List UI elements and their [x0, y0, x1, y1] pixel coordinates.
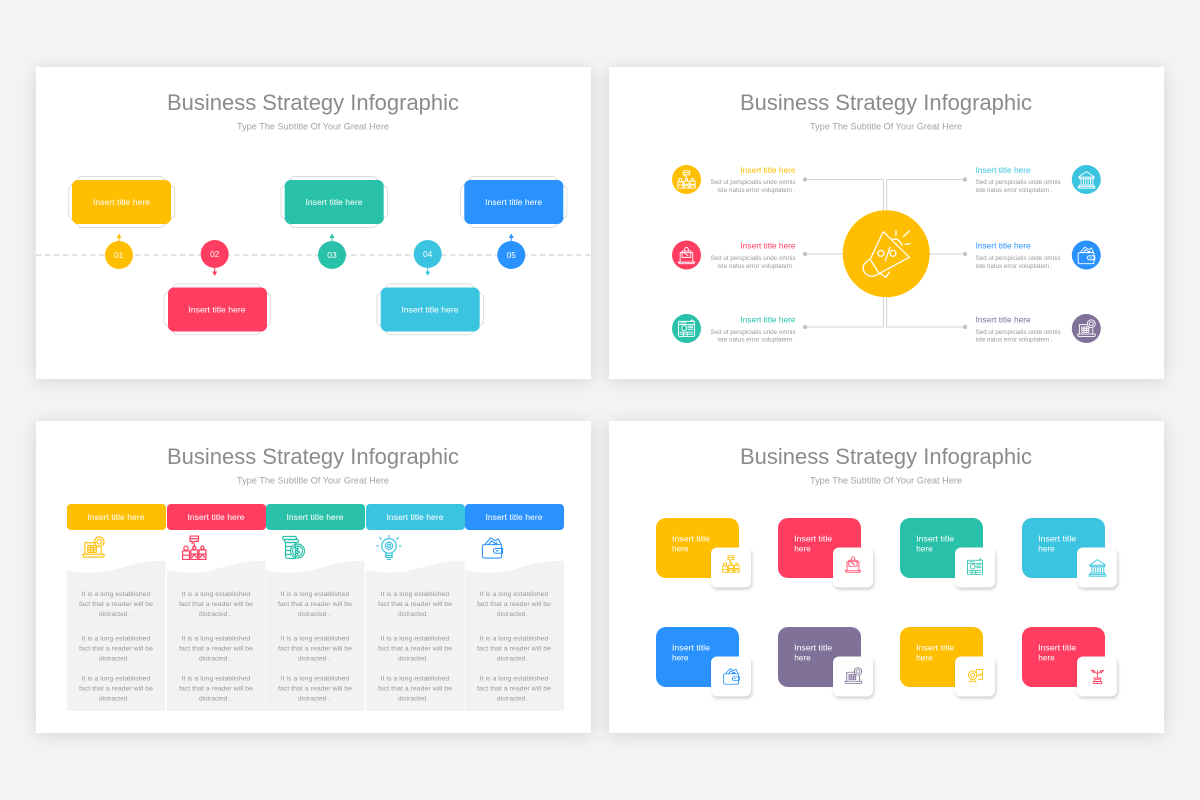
column 4: fact that a reader will be — [378, 601, 452, 608]
item: cyan, right top: iste natus error voluptatem . — [976, 187, 1053, 194]
column 5: fact that a reader will be — [477, 601, 551, 608]
card 3: Insert title — [916, 534, 954, 544]
step 04 title box: Insert title here — [402, 304, 459, 314]
step 04 marker: 04 — [423, 249, 433, 259]
subtitle: Type The Subtitle Of Your Great Here — [237, 122, 389, 132]
step 05 marker — [497, 234, 525, 269]
column 4 — [366, 504, 465, 711]
item: yellow, left top: iste natus error voluptatem . — [718, 187, 796, 194]
column 5: It is a long established — [480, 676, 548, 682]
card 4: Insert title — [1038, 534, 1076, 544]
title: Business Strategy Infographic — [167, 444, 459, 469]
column 2: fact that a reader will be — [179, 601, 253, 608]
item: red, left middle: Insert title here — [740, 240, 796, 250]
item: yellow, left top: Insert title here — [740, 165, 796, 175]
column 2: distracted . — [199, 611, 231, 618]
column 2: It is a long established — [182, 591, 250, 598]
column 5: Insert title here — [486, 512, 543, 522]
item: teal, left bottom: iste natus error voluptatem . — [718, 337, 796, 344]
column 1: It is a long established — [82, 636, 150, 643]
step 02 marker — [201, 240, 229, 276]
step 01 title box — [68, 176, 175, 228]
item: teal, left bottom: Sed ut perspiciatis unde omnis — [710, 329, 796, 336]
column 1: fact that a reader will be — [79, 601, 153, 608]
item: purple, right bottom: iste natus error voluptatem . — [976, 337, 1053, 344]
panel: hub diagram — [609, 67, 1164, 379]
card 1 — [656, 518, 751, 588]
step 01 marker: 01 — [114, 250, 124, 260]
item: purple, right bottom: Insert title here — [976, 314, 1031, 324]
column 4: Insert title here — [386, 512, 444, 522]
step 02 marker: 02 — [210, 249, 220, 259]
column 1: distracted . — [99, 656, 131, 663]
card 7: here — [916, 652, 933, 662]
item: red, left middle: Sed ut perspiciatis unde omnis — [710, 255, 796, 262]
column 3: Insert title here — [286, 512, 344, 522]
column 3: It is a long established — [281, 591, 349, 598]
card 3 — [900, 518, 995, 588]
card 2: here — [794, 544, 811, 554]
card 1: here — [672, 544, 689, 554]
item: red, left middle: iste natus error voluptatem . — [718, 263, 796, 270]
card 5: here — [672, 652, 689, 662]
column 1: fact that a reader will be — [79, 646, 153, 652]
column 1: distracted . — [99, 695, 131, 702]
step 02 title box — [164, 284, 270, 335]
column 4: distracted . — [398, 656, 430, 663]
column 3: fact that a reader will be — [278, 601, 352, 608]
column 4: It is a long established — [381, 591, 449, 598]
column 4: It is a long established — [381, 676, 449, 682]
card 7: Insert title — [916, 642, 954, 652]
title: Business Strategy Infographic — [167, 90, 459, 115]
column 5: fact that a reader will be — [477, 646, 551, 652]
column 2: distracted . — [199, 656, 231, 663]
column 1: distracted . — [99, 611, 131, 618]
step 05 marker: 05 — [507, 250, 516, 260]
column 4: distracted . — [398, 611, 430, 618]
item: yellow, left top — [672, 165, 796, 194]
column 4: fact that a reader will be — [378, 646, 452, 652]
column 2 — [167, 504, 266, 711]
column 4: distracted . — [398, 695, 430, 702]
card 5 — [656, 627, 751, 696]
subtitle: Type The Subtitle Of Your Great Here — [810, 476, 962, 486]
column 1 — [67, 504, 166, 711]
step 02 title box: Insert title here — [188, 304, 246, 314]
step 05 title box: Insert title here — [485, 197, 542, 207]
column 5: distracted . — [497, 695, 529, 702]
step 05 title box — [460, 176, 567, 228]
item: yellow, left top: Sed ut perspiciatis unde omnis — [710, 179, 796, 186]
subtitle: Type The Subtitle Of Your Great Here — [237, 476, 389, 486]
column 1: It is a long established — [82, 676, 150, 682]
title: Business Strategy Infographic — [740, 444, 1032, 469]
column 1: It is a long established — [82, 591, 150, 598]
card 6 — [778, 627, 873, 696]
column 5: It is a long established — [480, 591, 548, 598]
step 03 marker — [318, 234, 346, 269]
column 3: It is a long established — [281, 676, 349, 682]
step 03 title box: Insert title here — [306, 197, 363, 207]
step 04 title box — [377, 284, 483, 335]
card 8 — [1022, 627, 1117, 696]
column 3: distracted . — [298, 656, 330, 663]
column 3: distracted . — [298, 695, 330, 702]
column 2: Insert title here — [188, 512, 245, 522]
column 5: It is a long established — [480, 636, 548, 643]
column 2: It is a long established — [182, 636, 250, 643]
column 5: fact that a reader will be — [477, 685, 551, 692]
card 2: Insert title — [794, 534, 832, 544]
column 1: Insert title here — [88, 512, 145, 522]
dashed timeline — [36, 254, 591, 256]
item: cyan, right top: Insert title here — [976, 165, 1031, 175]
item: blue, right middle: iste natus error voluptatem . — [976, 263, 1053, 270]
step 03 title box — [281, 176, 387, 228]
subtitle: Type The Subtitle Of Your Great Here — [810, 122, 962, 132]
column 3: fact that a reader will be — [278, 685, 352, 692]
step 01 title box: Insert title here — [93, 197, 150, 207]
step 03 marker: 03 — [327, 250, 337, 260]
column 2: distracted . — [199, 695, 231, 702]
connector lines — [803, 177, 967, 329]
column 3: It is a long established — [281, 636, 349, 643]
card 6: Insert title — [794, 642, 832, 652]
panel: five columns — [36, 421, 591, 733]
title: Business Strategy Infographic — [740, 90, 1032, 115]
card 5: Insert title — [672, 642, 710, 652]
item: red, left middle — [672, 240, 796, 270]
column 5 — [465, 504, 564, 711]
item: blue, right middle — [976, 240, 1101, 270]
item: purple, right bottom: Sed ut perspiciatis unde omnis — [976, 329, 1061, 336]
column 5: distracted . — [497, 656, 529, 663]
item: teal, left bottom — [672, 314, 796, 344]
card 4 — [1022, 518, 1117, 588]
column 4: fact that a reader will be — [378, 685, 452, 692]
card 8: Insert title — [1038, 642, 1076, 652]
card 8: here — [1038, 652, 1055, 662]
item: cyan, right top: Sed ut perspiciatis unde omnis — [976, 179, 1061, 186]
item: blue, right middle: Sed ut perspiciatis unde omnis — [976, 255, 1061, 262]
step 04 marker — [414, 240, 442, 276]
column 3: distracted . — [298, 611, 330, 618]
item: blue, right middle: Insert title here — [976, 240, 1031, 250]
panel: icon cards — [609, 421, 1164, 733]
column 3 — [266, 504, 365, 711]
card 2 — [778, 518, 873, 588]
card 6: here — [794, 652, 811, 662]
step 01 marker — [105, 234, 133, 269]
item: teal, left bottom: Insert title here — [740, 314, 796, 324]
column 3: fact that a reader will be — [278, 646, 352, 652]
column 1: fact that a reader will be — [79, 685, 153, 692]
card 7 — [900, 627, 995, 696]
column 2: fact that a reader will be — [179, 646, 253, 652]
card 1: Insert title — [672, 534, 710, 544]
column 5: distracted . — [497, 611, 529, 618]
panel: timeline — [36, 67, 591, 379]
column 2: It is a long established — [182, 676, 250, 682]
card 3: here — [916, 544, 933, 554]
column 4: It is a long established — [381, 636, 449, 643]
item: cyan, right top — [976, 165, 1101, 194]
item: purple, right bottom — [976, 314, 1101, 344]
column 2: fact that a reader will be — [179, 685, 253, 692]
central megaphone icon — [843, 210, 930, 297]
card 4: here — [1038, 544, 1055, 554]
